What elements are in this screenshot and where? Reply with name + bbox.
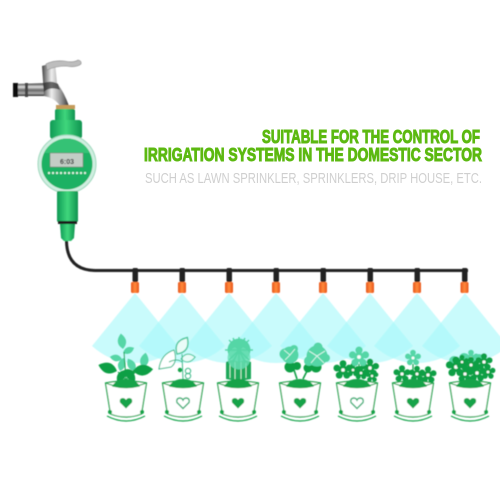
potted plant 1	[97, 333, 154, 421]
lcd screen: 6:03	[60, 159, 74, 166]
potted plant 4	[280, 342, 330, 421]
potted plant 5	[333, 347, 379, 421]
water spray cones	[92, 293, 500, 363]
timer body	[38, 109, 96, 241]
potted plant 3	[218, 337, 258, 421]
sprinkler nozzles	[131, 268, 468, 293]
heading	[144, 127, 482, 165]
brass ring	[56, 105, 75, 109]
faucet	[13, 60, 81, 106]
drip pipe	[66, 241, 468, 270]
potted plant 2	[159, 335, 204, 421]
outlet connector	[57, 191, 78, 241]
threaded collar	[50, 109, 82, 139]
potted plant 7	[446, 350, 495, 421]
buttons	[48, 172, 86, 174]
potted plant 6	[392, 350, 436, 421]
